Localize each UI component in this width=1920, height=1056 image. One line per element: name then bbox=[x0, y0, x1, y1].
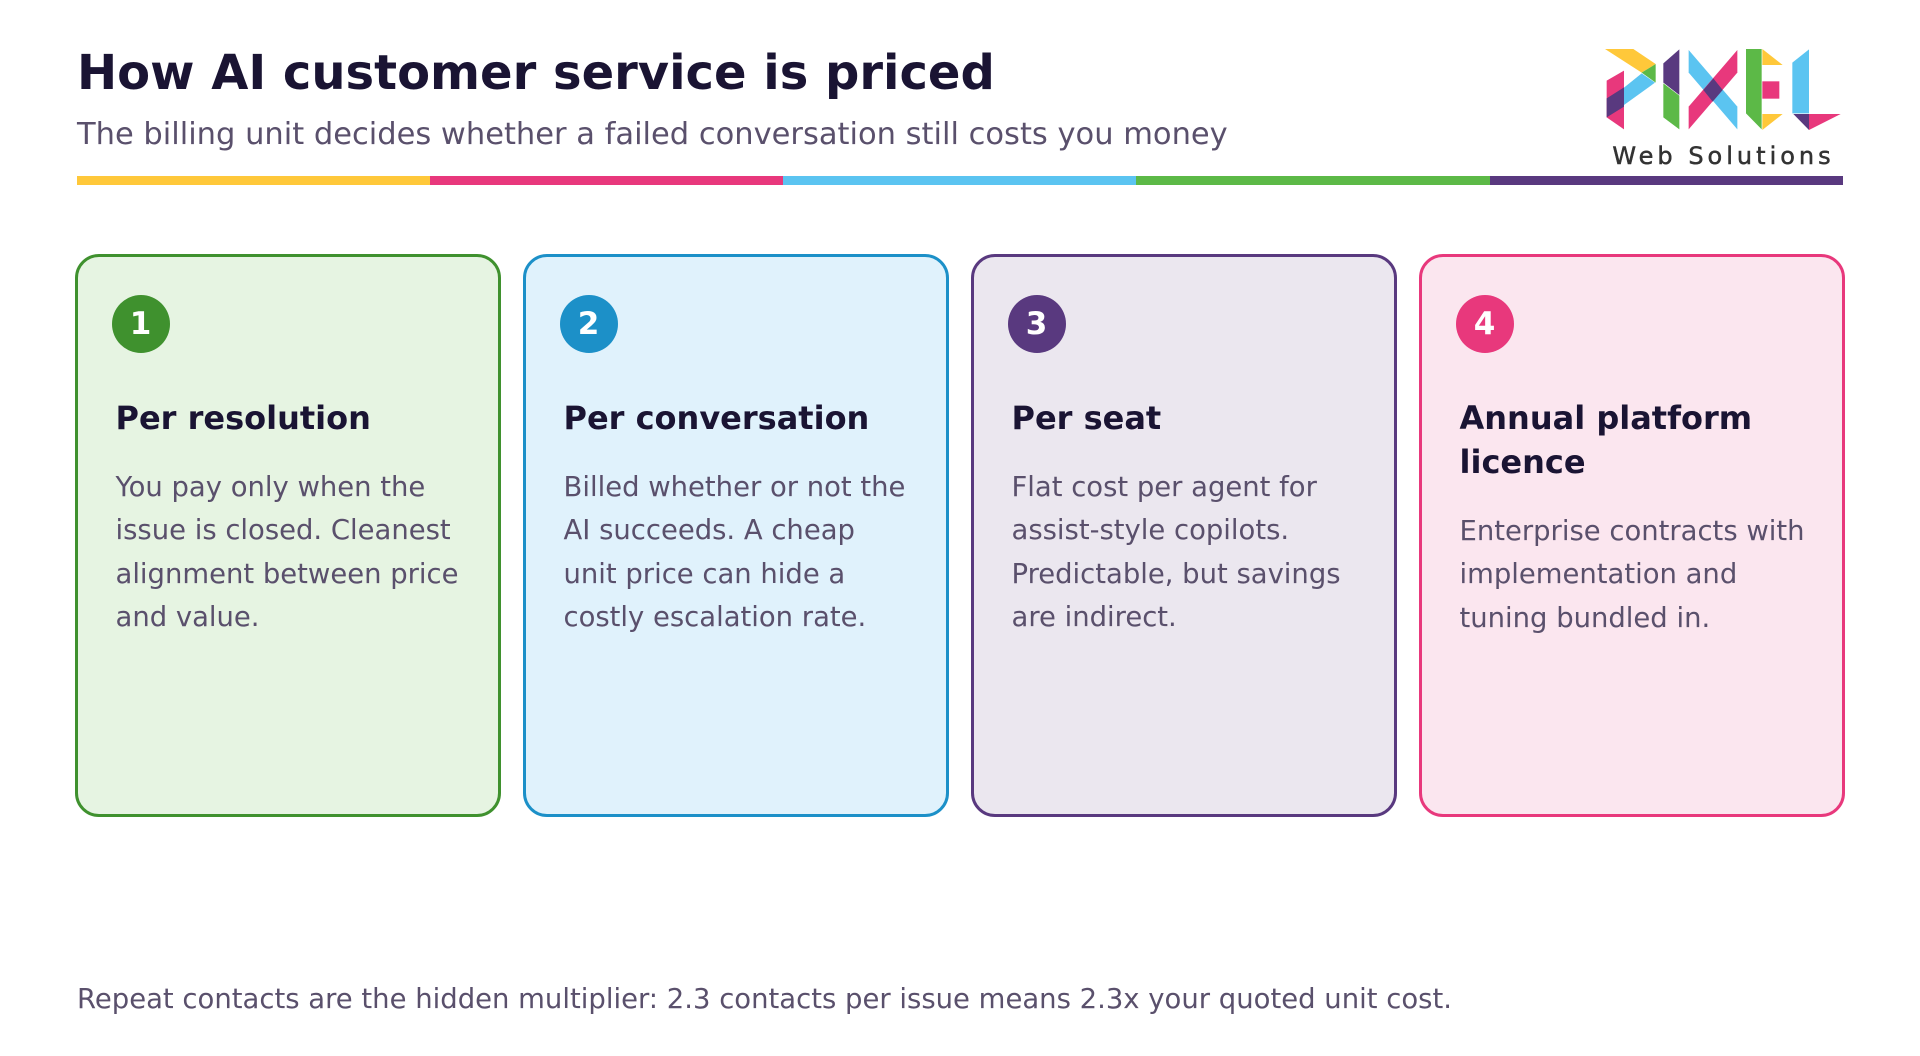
logo text: Web Solutions bbox=[1612, 142, 1834, 170]
panel: per resolution bbox=[75, 254, 501, 817]
body text: assist-style copilots. bbox=[1012, 515, 1289, 546]
panel: per conversation bbox=[523, 254, 949, 817]
number badge 3 bbox=[1008, 294, 1066, 352]
number badge 4: 4 bbox=[1474, 306, 1495, 342]
body text: Flat cost per agent for bbox=[1012, 472, 1317, 503]
logo: Pixel Web Solutions bbox=[1605, 49, 1840, 170]
body text: unit price can hide a bbox=[564, 559, 845, 590]
title: How AI customer service is priced bbox=[77, 45, 995, 101]
number badge 1: 1 bbox=[130, 306, 151, 342]
body text bbox=[1012, 472, 1341, 633]
body text: costly escalation rate. bbox=[564, 602, 866, 633]
heading: per seat: Per seat bbox=[1012, 399, 1161, 437]
panel: annual platform licence bbox=[1419, 254, 1845, 817]
body text bbox=[564, 472, 905, 633]
number badge 1 bbox=[112, 294, 170, 352]
body text: implementation and bbox=[1460, 559, 1737, 590]
heading: per resolution: Per resolution bbox=[116, 399, 371, 437]
body text bbox=[1460, 516, 1805, 634]
number badge 2 bbox=[560, 294, 618, 352]
number badge 3: 3 bbox=[1026, 306, 1047, 342]
colour bar bbox=[77, 176, 1843, 185]
heading: per conversation: Per conversation bbox=[564, 399, 869, 437]
body text: are indirect. bbox=[1012, 602, 1177, 633]
body text: Billed whether or not the bbox=[564, 472, 905, 503]
body text: AI succeeds. A cheap bbox=[564, 515, 855, 546]
body text: You pay only when the bbox=[116, 472, 425, 503]
footer note: Repeat contacts are the hidden multiplier: 2.3 contacts per issue means 2.3x your quoted unit cost. bbox=[77, 984, 1452, 1015]
body text: issue is closed. Cleanest bbox=[116, 515, 451, 546]
number badge 4 bbox=[1456, 294, 1514, 352]
body text: Predictable, but savings bbox=[1012, 559, 1341, 590]
number badge 2: 2 bbox=[578, 306, 599, 342]
body text: tuning bundled in. bbox=[1460, 603, 1710, 634]
heading: annual platform licence bbox=[1460, 399, 1752, 481]
panel: per seat bbox=[971, 254, 1397, 817]
body text: Enterprise contracts with bbox=[1460, 516, 1805, 547]
subtitle: The billing unit decides whether a failed conversation still costs you money bbox=[77, 117, 1228, 152]
body text bbox=[116, 472, 458, 633]
heading: annual platform licence: Annual platform bbox=[1460, 399, 1752, 437]
body text: and value. bbox=[116, 602, 260, 633]
heading: annual platform licence: licence bbox=[1460, 443, 1586, 481]
body text: alignment between price bbox=[116, 559, 458, 590]
